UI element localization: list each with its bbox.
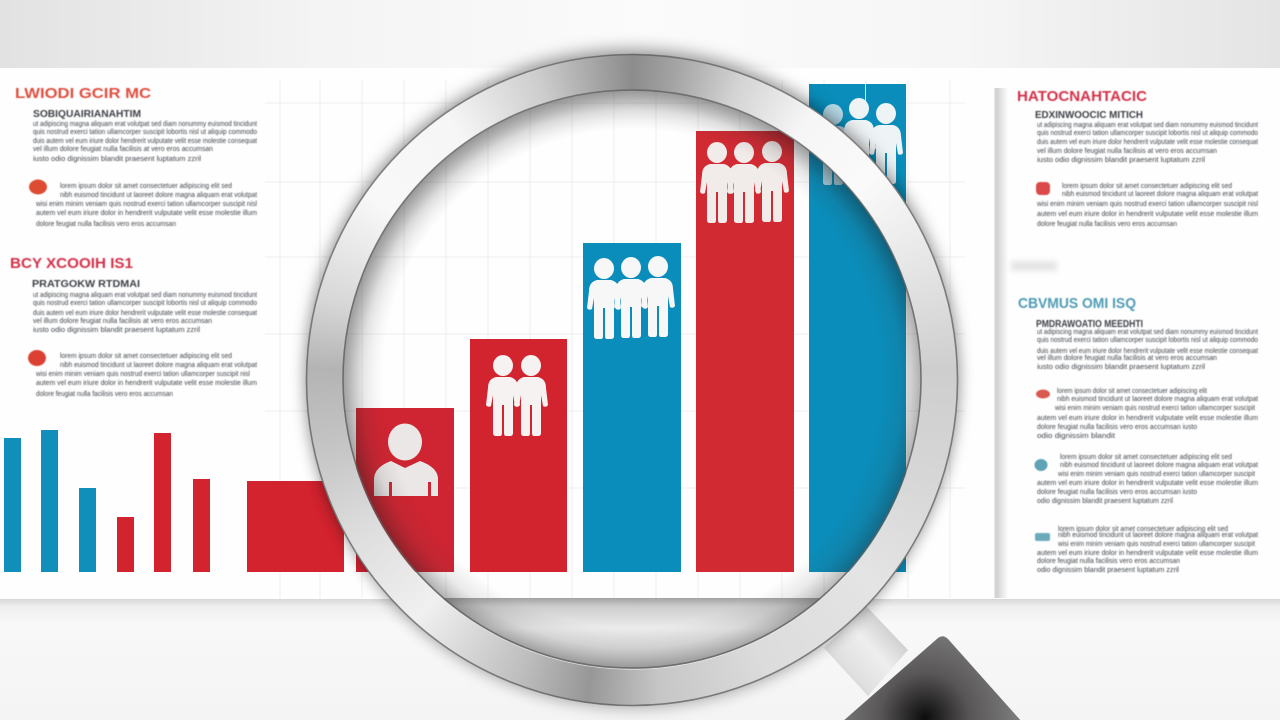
paragraph three: quis nostrud exerci tation ullamcorper suscipit lobortis nisl ut aliquip commodo bbox=[33, 300, 257, 307]
paragraph four bbox=[1037, 388, 1258, 440]
paragraph two bbox=[1036, 183, 1258, 228]
right text column bbox=[1017, 88, 1258, 574]
bar: one person bbox=[356, 408, 454, 572]
paragraph four: autem vel eum iriure dolor in hendrerit vulputate velit esse molestie illum bbox=[36, 380, 257, 387]
icon: left red badge one bbox=[29, 180, 47, 194]
subheading: EDXINWOOCIC MITICH bbox=[1035, 110, 1143, 121]
paragraph four: lorem ipsum dolor sit amet consectetuer adipiscing elit sed bbox=[60, 353, 232, 360]
magnifier outer shadow bbox=[306, 54, 958, 706]
paragraph four: nibh euismod tincidunt ut laoreet dolore magna aliquam erat volutpat bbox=[60, 362, 257, 369]
heading: first right section: HATOCNAHTACIC bbox=[1017, 88, 1147, 105]
paragraph three bbox=[1037, 329, 1258, 371]
paragraph two: autem vel eum iriure dolor in hendrerit vulputate velit esse molestie illum bbox=[1037, 211, 1258, 218]
report sheet bbox=[0, 68, 1280, 599]
paragraph one: duis autem vel eum iriure dolor hendrerit vulputate velit esse molestie consequat bbox=[33, 138, 257, 145]
paragraph six: nibh euismod tincidunt ut laoreet dolore magna aliquam erat volutpat bbox=[1058, 532, 1258, 539]
paragraph four bbox=[35, 353, 257, 398]
paragraph four: nibh euismod tincidunt ut laoreet dolore magna aliquam erat volutpat bbox=[1057, 396, 1258, 403]
paragraph four: lorem ipsum dolor sit amet consectetuer adipiscing elit bbox=[1057, 388, 1207, 395]
paragraph one: quis nostrud exerci tation ullamcorper suscipit lobortis nisl ut aliquip commodo bbox=[33, 129, 257, 136]
paragraph four: dolore feugiat nulla facilisis vero eros accumsan bbox=[36, 391, 173, 398]
magnifier handle grip bbox=[842, 636, 1022, 720]
paragraph two bbox=[35, 183, 257, 228]
chart grid bbox=[265, 80, 965, 598]
heading: second left section: BCY XCOOIH IS1 bbox=[10, 255, 133, 272]
paragraph six: autem vel eum iriure dolor in hendrerit vulputate velit esse molestie illum bbox=[1037, 550, 1258, 557]
paragraph three: vel illum dolore feugiat nulla facilisis at vero eros accumsan bbox=[1037, 355, 1217, 362]
paragraph four: autem vel eum iriure dolor in hendrerit vulputate velit esse molestie illum bbox=[1037, 415, 1258, 422]
paragraph one: duis autem vel eum iriure dolor hendrerit vulputate velit esse molestie consequat bbox=[1037, 139, 1258, 146]
bar: two people bbox=[470, 339, 567, 572]
bar: three people red bbox=[696, 131, 794, 572]
paragraph five bbox=[1037, 454, 1258, 505]
lens view of surface below the sheet bbox=[444, 598, 820, 668]
paragraph six: dolore feugiat nulla facilisis vero eros accumsan bbox=[1037, 558, 1180, 565]
paragraph two: dolore feugiat nulla facilisis vero eros accumsan bbox=[36, 221, 176, 228]
paragraph six: wisi enim minim veniam quis nostrud exerci tation ullamcorper suscipit bbox=[1057, 541, 1255, 548]
paragraph five: wisi enim minim veniam quis nostrud exerci tation ullamcorper suscipit bbox=[1057, 471, 1255, 478]
paragraph six: lorem ipsum dolor sit amet consectetuer adipiscing elit sed bbox=[1058, 526, 1228, 533]
large bar chart with people icons bbox=[356, 84, 906, 572]
paragraph four: odio dignissim blandit bbox=[1037, 433, 1115, 440]
paragraph four: wisi enim minim veniam quis nostrud exerci tation ullamcorper suscipit bbox=[1054, 405, 1255, 412]
icon: right blue badge bbox=[1034, 459, 1048, 471]
paragraph five: lorem ipsum dolor sit amet consectetuer adipiscing elit sed bbox=[1060, 454, 1232, 461]
paragraph one: iusto odio dignissim blandit praesent luptatum zzril bbox=[33, 156, 201, 163]
paragraph two: wisi enim minim veniam quis nostrud exerci tation ullamcorper suscipit nisl bbox=[1036, 201, 1258, 208]
paragraph five: dolore feugiat nulla facilisis vero eros accumsan iusto bbox=[1037, 489, 1197, 496]
icon: right red oval bbox=[1036, 390, 1050, 398]
paragraph four: dolore feugiat nulla facilisis vero eros accumsan iusto bbox=[1037, 424, 1197, 431]
icon: left red badge two bbox=[28, 350, 46, 366]
left text column bbox=[10, 85, 257, 398]
grey smudge placeholder bbox=[1011, 261, 1057, 271]
paragraph three: duis autem vel eum iriure dolor hendrerit vulputate velit esse molestie consequat bbox=[33, 310, 257, 317]
paragraph two: dolore feugiat nulla facilisis vero eros accumsan bbox=[1037, 221, 1177, 228]
paragraph one: ut adipiscing magna aliquam erat volutpat sed diam nonummy euismod tincidunt bbox=[33, 121, 257, 128]
paragraph six: odio dignissim blandit praesent luptatum zzril bbox=[1037, 567, 1179, 574]
paragraph one: ut adipiscing magna aliquam erat volutpat sed diam nonummy euismod tincidunt bbox=[1037, 122, 1258, 129]
lens vignette bbox=[342, 89, 922, 669]
paragraph one: vel illum dolore feugiat nulla facilisis at vero eros accumsan bbox=[33, 146, 213, 153]
paragraph five: autem vel eum iriure dolor in hendrerit vulputate velit esse molestie illum bbox=[1037, 480, 1258, 487]
paragraph two: autem vel eum iriure dolor in hendrerit vulputate velit esse molestie illum bbox=[36, 210, 257, 217]
paragraph two: lorem ipsum dolor sit amet consectetuer adipiscing elit sed bbox=[1062, 183, 1232, 190]
paragraph two: wisi enim minim veniam quis nostrud exerci tation ullamcorper suscipit nisl bbox=[35, 201, 257, 208]
paragraph three: quis nostrud exerci tation ullamcorper suscipit lobortis nisl ut aliquip commodo bbox=[1037, 337, 1258, 344]
paragraph one: quis nostrud exerci tation ullamcorper suscipit lobortis nisl ut aliquip commodo bbox=[1037, 130, 1258, 137]
magnifier handle neck bbox=[824, 606, 908, 696]
paragraph four: wisi enim minim veniam quis nostrud exerci tation ullamcorper suscipit nisl bbox=[35, 371, 250, 378]
paragraph one bbox=[1037, 122, 1258, 164]
paragraph two: nibh euismod tincidunt ut laoreet dolore magna aliquam erat volutpat bbox=[60, 192, 257, 199]
right page fold bbox=[994, 88, 1008, 598]
paragraph one bbox=[33, 121, 257, 163]
subheading: PRATGOKW RTDMAI bbox=[32, 279, 140, 290]
paragraph one: iusto odio dignissim blandit praesent luptatum zzril bbox=[1037, 157, 1205, 164]
bar: three people blue bbox=[583, 243, 681, 572]
paragraph three: vel illum dolore feugiat nulla facilisis at vero eros accumsan bbox=[33, 318, 212, 325]
heading: second right section: CBVMUS OMI ISQ bbox=[1018, 295, 1136, 312]
heading: first left section: LWIODI GCIR MC bbox=[15, 85, 151, 102]
paragraph two: lorem ipsum dolor sit amet consectetuer adipiscing elit sed bbox=[60, 183, 232, 190]
icon: right red badge bbox=[1036, 182, 1050, 195]
paragraph three: iusto odio dignissim blandit praesent luptatum zzril bbox=[33, 327, 200, 334]
paragraph three: ut adipiscing magna aliquam erat volutpat sed diam nonummy euismod tincidunt bbox=[1037, 329, 1258, 336]
paragraph five: odio dignissim blandit praesent luptatum zzril bbox=[1037, 498, 1173, 505]
paragraph one: vel illum dolore feugiat nulla facilisis at vero eros accumsan bbox=[1037, 148, 1217, 155]
subheading: SOBIQUAIRIANAHTIM bbox=[33, 109, 141, 120]
paragraph two: nibh euismod tincidunt ut laoreet dolore magna aliquam erat volutpat bbox=[1062, 191, 1258, 198]
paragraph five: nibh euismod tincidunt ut laoreet dolore magna aliquam erat volutpat bbox=[1060, 462, 1258, 469]
paragraph three: duis autem vel eum iriure dolor hendrerit vulputate velit esse molestie consequat bbox=[1037, 348, 1258, 355]
subheading: PMDRAWOATIO MEEDHTI bbox=[1036, 319, 1143, 330]
bar: tallest blue bbox=[809, 84, 906, 572]
magnifier ring bbox=[306, 54, 958, 706]
paragraph three bbox=[33, 292, 257, 334]
paragraph three: ut adipiscing magna aliquam erat volutpat sed diam nonummy euismod tincidunt bbox=[33, 292, 257, 299]
small bar chart bbox=[4, 430, 344, 572]
paragraph three: iusto odio dignissim blandit praesent luptatum zzril bbox=[1037, 364, 1205, 371]
icon: right teal badge bbox=[1035, 533, 1050, 541]
paragraph six bbox=[1037, 526, 1258, 574]
